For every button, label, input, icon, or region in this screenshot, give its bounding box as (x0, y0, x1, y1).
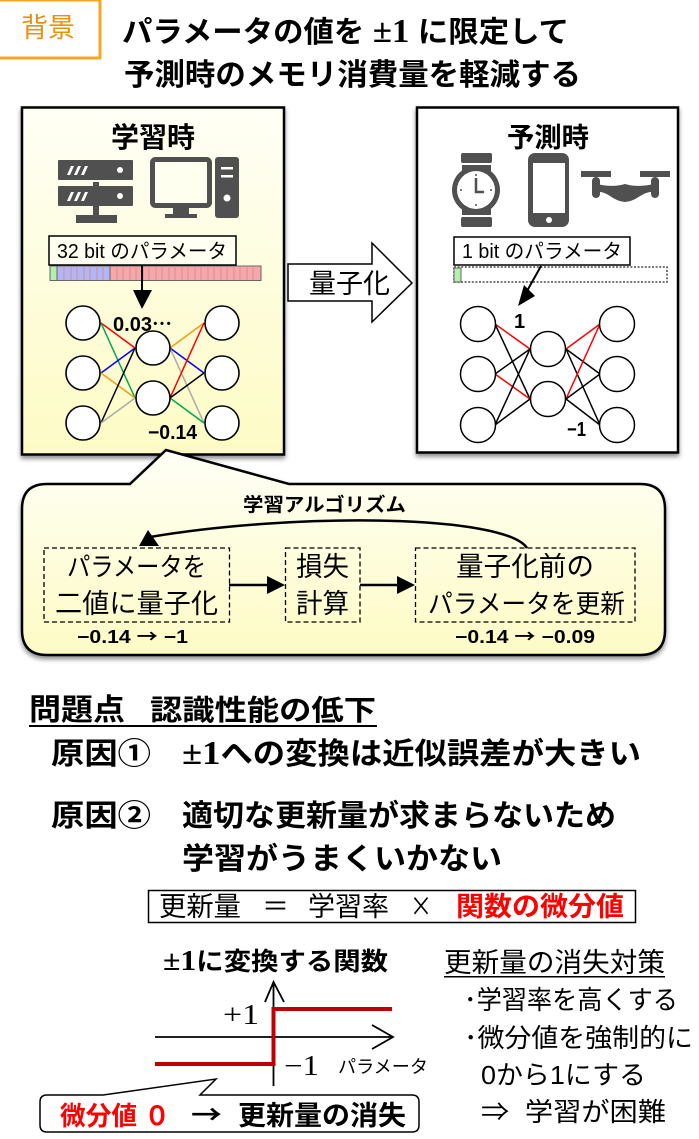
value: -1: −1 (567, 419, 586, 441)
icon: smartphone (528, 153, 569, 227)
text: cause 2: 適切な更新量が求まらないため (182, 799, 616, 833)
formula box: 更新量 (159, 892, 241, 922)
box: loss: 損失 (296, 552, 349, 582)
value: 1: 1 (514, 311, 525, 333)
arrow: quantize to loss (229, 576, 285, 594)
arrow: quantization: 量子化 (309, 269, 390, 299)
heading: training: 学習時 (111, 122, 195, 153)
text: countermeasures (444, 948, 693, 1127)
arrow: loss to update (360, 576, 415, 594)
label: 32 bit parameter: 32 bit のパラメータ (57, 240, 227, 263)
box: loss (286, 548, 360, 622)
text: countermeasures: ･微分値を強制的に (464, 1023, 693, 1053)
title: 予測時のメモリ消費量を軽減する (124, 59, 581, 92)
formula box: 関数の微分値 (456, 892, 624, 922)
callout: vanishing update: 更新量の消失 (238, 1101, 406, 1131)
heading: problem: 認識性能の低下 (150, 695, 376, 727)
value: quantize example: −0.14 → −1 (77, 623, 188, 649)
title: パラメータの値を ±1 に限定して (122, 13, 569, 50)
heading: problem: 問題点 (29, 694, 125, 727)
network: inference (460, 306, 634, 442)
icon: smartwatch (452, 153, 500, 227)
heading: inference: 予測時 (507, 123, 589, 153)
heading: step function: ±1に変換する関数 (163, 945, 388, 977)
chart: step function: パラメータ (338, 1057, 428, 1077)
formula box: ＝ (262, 892, 289, 922)
callout: training algorithm (22, 450, 665, 655)
icon: desktop computer (152, 157, 239, 218)
text: cause 1: ±1への変換は近似誤差が大きい (182, 735, 641, 772)
icon: drone (581, 171, 670, 202)
tag: background label: 背景 (21, 13, 75, 43)
panel: training (22, 108, 284, 454)
text: countermeasures: ⇒ 学習が困難 (481, 1097, 666, 1127)
text: cause 2: 原因② (51, 800, 151, 833)
callout: vanishing update: 微分値 ０ (60, 1101, 170, 1131)
box: quantize: パラメータを (67, 552, 206, 582)
title (122, 13, 581, 92)
text: countermeasures: 0から1にする (481, 1060, 646, 1090)
box: update: パラメータを更新 (428, 589, 625, 619)
text: cause 2 (51, 799, 616, 876)
formula box (148, 885, 636, 924)
text: countermeasures: 更新量の消失対策 (444, 948, 665, 978)
box: loss: 計算 (296, 589, 349, 619)
formula box: × (410, 885, 432, 924)
box: update: 量子化前の (456, 552, 594, 582)
text: countermeasures: ･学習率を高くする (464, 985, 678, 1015)
chart: step function (155, 982, 428, 1086)
panel: inference (417, 108, 678, 452)
heading: problem (29, 694, 377, 727)
chart: step function: −1 (284, 1051, 319, 1082)
icon: server (58, 160, 133, 223)
text: cause 2: 学習がうまくいかない (182, 842, 502, 876)
tag: background label (0, 0, 100, 58)
chart: step function: +1 (223, 1000, 259, 1031)
box: quantize: 二値に量子化 (55, 589, 218, 619)
bit bar: 32 bit (50, 266, 261, 280)
box: update (416, 548, 635, 622)
arrow: quantization (288, 243, 412, 322)
formula box: 学習率 (308, 892, 389, 922)
arrow: parameter to network (133, 265, 152, 309)
callout: vanishing update (40, 1079, 419, 1132)
arrow: feedback loop (139, 520, 527, 548)
value: -0.14: −0.14 (148, 422, 198, 444)
text: cause 1: 原因① (51, 738, 151, 771)
box: quantize (44, 548, 230, 622)
value: update example: −0.14 → −0.09 (455, 623, 595, 649)
bit bar: 1 bit (454, 267, 667, 282)
value: 0.03: 0.03⋯ (113, 314, 172, 336)
label: 1 bit parameter: 1 bit のパラメータ (462, 240, 622, 263)
arrow: parameter to weight (518, 266, 541, 306)
heading: algorithm: 学習アルゴリズム (243, 493, 406, 516)
network: training (66, 306, 239, 440)
callout: vanishing update: → (191, 1095, 222, 1132)
